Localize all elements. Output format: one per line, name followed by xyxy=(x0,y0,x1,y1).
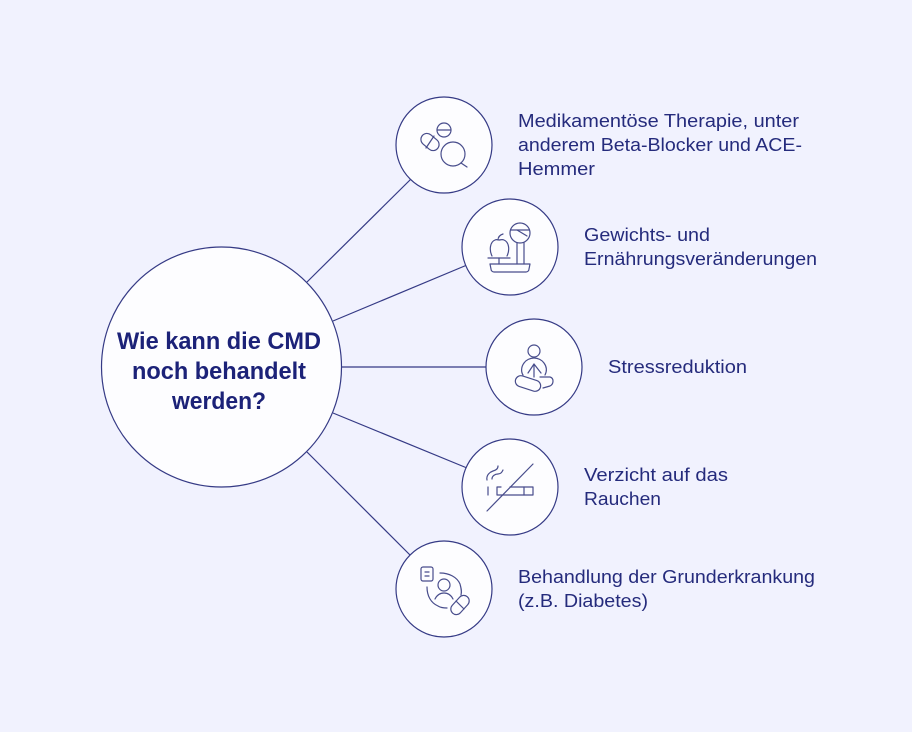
heading: werden? xyxy=(171,388,266,415)
connector: underlying disease xyxy=(307,452,411,556)
item: medication xyxy=(396,97,802,193)
label: Behandlung der Grunderkrankung xyxy=(518,567,815,587)
icon: pills and magnifier xyxy=(418,123,467,167)
connector: smoking xyxy=(333,413,467,468)
item: no smoking xyxy=(462,439,728,535)
icon: meditating person xyxy=(514,345,553,393)
label: Verzicht auf das xyxy=(584,465,728,485)
item: stress reduction xyxy=(486,319,747,415)
icon: apple on scale xyxy=(488,223,530,272)
label: anderem Beta-Blocker und ACE- xyxy=(518,135,802,155)
label: Stressreduktion xyxy=(608,357,747,377)
label: Hemmer xyxy=(518,159,595,179)
label: Medikamentöse Therapie, unter xyxy=(518,111,799,131)
heading: noch behandelt xyxy=(132,358,306,385)
label: (z.B. Diabetes) xyxy=(518,591,648,611)
icon: patient with note and pill xyxy=(421,567,471,617)
label: Gewichts- und xyxy=(584,225,710,245)
connector: weight xyxy=(333,265,467,321)
label: Rauchen xyxy=(584,489,661,509)
connector: stress xyxy=(341,366,486,368)
label: Ernährungsveränderungen xyxy=(584,249,817,269)
item: underlying disease xyxy=(396,541,815,637)
heading: Wie kann die CMD xyxy=(117,328,321,355)
item: weight and nutrition xyxy=(462,199,817,295)
central circle xyxy=(102,247,342,487)
connector: medication xyxy=(307,179,411,282)
icon: crossed-out cigarette xyxy=(487,464,533,511)
